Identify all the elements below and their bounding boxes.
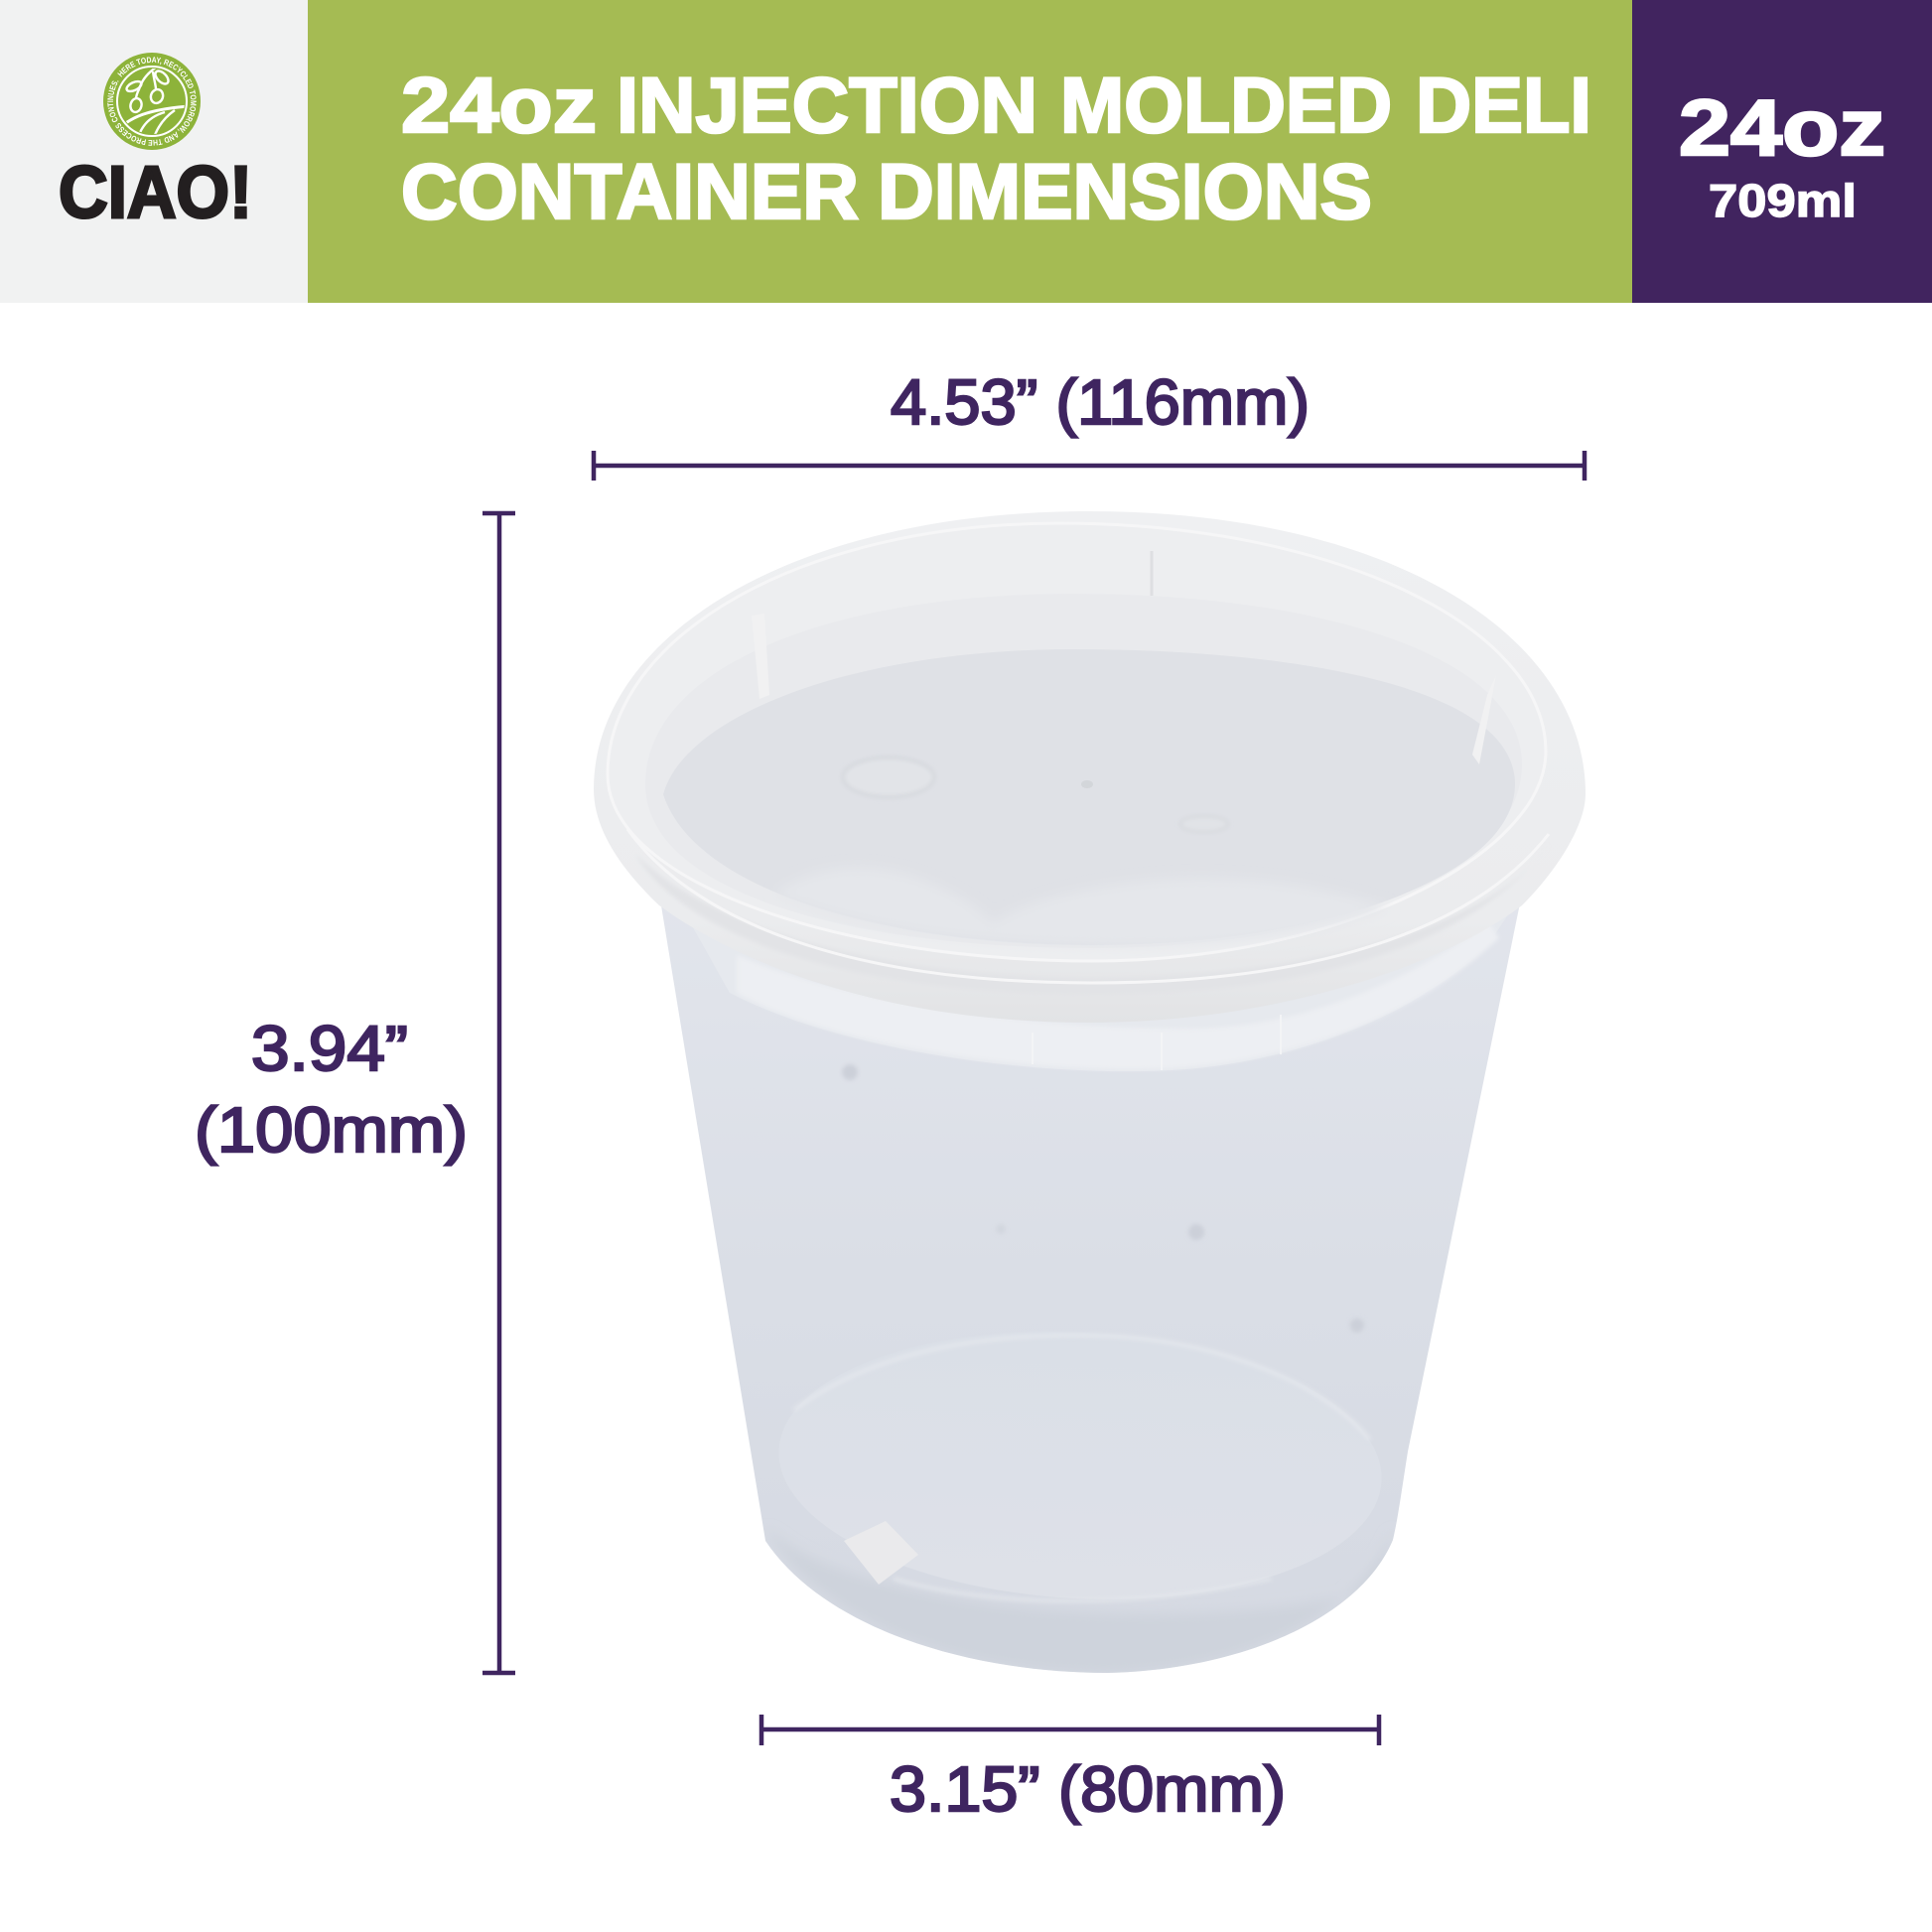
moulding dots (842, 1064, 1364, 1332)
title line 1: INJECTION (617, 61, 1037, 149)
lid centre panel (663, 649, 1515, 945)
capacity millilitres: 709ml (1709, 175, 1857, 226)
title panel (308, 0, 1632, 303)
bottom diameter dimension (761, 1715, 1379, 1825)
top diameter dimension (594, 366, 1585, 481)
lid shoulder shadow (635, 844, 1549, 995)
lid recess (645, 594, 1522, 948)
lid highlights (627, 551, 1549, 983)
logo panel (0, 0, 308, 303)
height label: 3.94” (251, 1013, 408, 1084)
height dimension (195, 513, 515, 1673)
header banner (0, 0, 1932, 303)
height label (195, 1013, 468, 1166)
capacity ounces: 24oz (1679, 83, 1885, 172)
height label: (100mm) (195, 1094, 468, 1166)
title line 1: DELI (1416, 61, 1591, 149)
lid inner lip (608, 523, 1546, 961)
capacity panel (1632, 0, 1932, 303)
title line 2: DIMENSIONS (878, 147, 1372, 235)
container body (659, 894, 1522, 1673)
lid outer rim (594, 511, 1586, 1023)
logo badge (103, 53, 201, 150)
badge ring text: HERE TODAY, RECYCLED TOMORROW, AND THE PROCESS CONTINUES. (107, 57, 197, 146)
title line 1: 24oz (401, 61, 597, 149)
title line 1 (401, 61, 1591, 149)
deli container with lid (594, 511, 1586, 1673)
olive branch and hills illustration (125, 69, 185, 134)
CIAO brand wordmark: CIAO! (59, 151, 252, 233)
container base (765, 1064, 1393, 1673)
title line 1: MOLDED (1060, 61, 1392, 149)
container rim band (685, 894, 1522, 1071)
title line 2 (401, 147, 1372, 235)
bottom diameter label: 3.15” (80mm) (890, 1753, 1286, 1825)
title line 2: CONTAINER (401, 147, 859, 235)
top diameter label: 4.53” (116mm) (891, 366, 1310, 438)
